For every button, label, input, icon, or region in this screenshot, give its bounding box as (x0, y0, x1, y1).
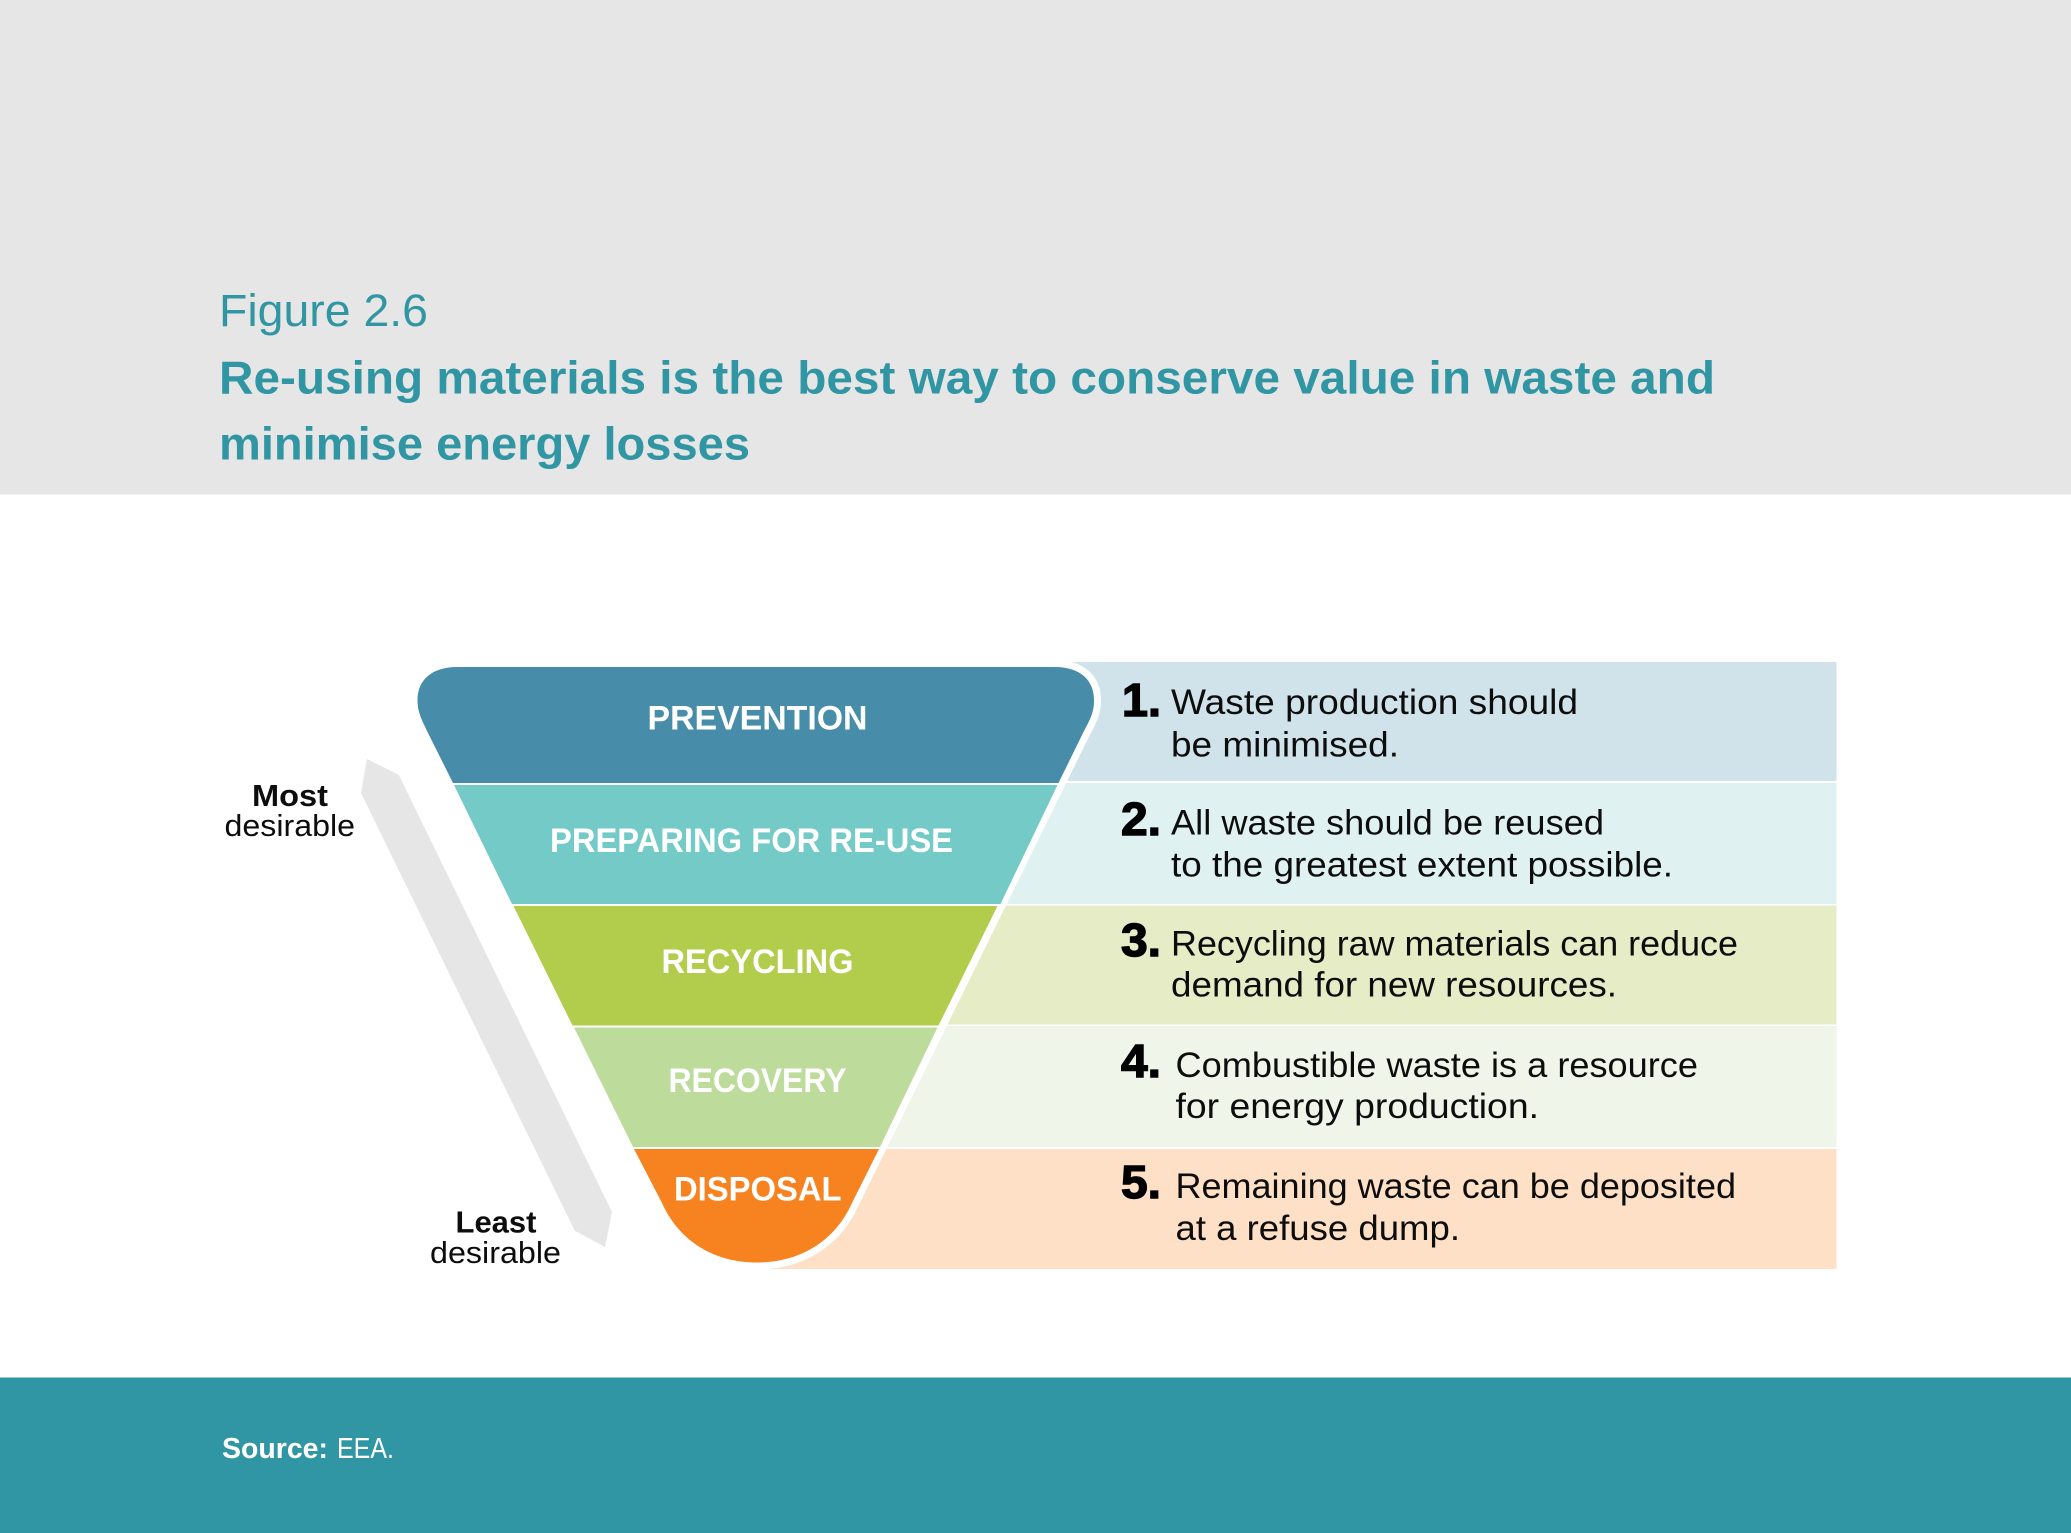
funnel tier: prevention: PREVENTION (648, 700, 868, 738)
statement 3: 3. (1121, 914, 1161, 966)
statement 2 (1121, 793, 1673, 884)
statement 2: to the greatest extent possible. (1171, 846, 1673, 884)
label: most desirable: desirable (224, 808, 355, 843)
source note: EEA. (337, 1433, 394, 1465)
label: least desirable: Least (456, 1204, 536, 1240)
label: least desirable: desirable (430, 1235, 561, 1270)
funnel white outline (418, 667, 1094, 1262)
row background 5 (757, 1149, 1836, 1269)
statement 5: 5. (1121, 1156, 1161, 1208)
statement 2: All waste should be reused (1171, 804, 1604, 842)
funnel tier: preparing for re-use: PREPARING FOR RE-USE (550, 822, 953, 860)
statement 5 (1121, 1156, 1736, 1248)
footer band (0, 1378, 2071, 1533)
row background 3 (757, 906, 1836, 1024)
source note (222, 1433, 394, 1465)
funnel tier: disposal (634, 1149, 879, 1262)
label: most desirable: Most (252, 778, 328, 813)
funnel hierarchy (418, 667, 1094, 1262)
funnel tier: disposal: DISPOSAL (674, 1170, 842, 1208)
statement 2: 2. (1121, 793, 1161, 845)
funnel tier: recycling (514, 906, 998, 1026)
row background 2 (757, 783, 1836, 904)
statement 1: Waste production should (1171, 683, 1578, 722)
statement 4 (1121, 1035, 1698, 1126)
statement 3: Recycling raw materials can reduce (1171, 924, 1738, 964)
statement 5: at a refuse dump. (1176, 1209, 1460, 1248)
row background 4 (757, 1026, 1836, 1147)
figure number: Figure 2.6 (219, 285, 428, 336)
funnel tier: recovery: RECOVERY (668, 1062, 847, 1100)
right-hand description rows (757, 662, 1836, 1269)
funnel tier: prevention (418, 667, 1094, 783)
statement 5: Remaining waste can be deposited (1176, 1167, 1736, 1206)
statement 4: 4. (1121, 1035, 1161, 1087)
funnel tier: recycling: RECYCLING (662, 943, 854, 981)
statement 4: Combustible waste is a resource (1176, 1046, 1698, 1085)
statement 4: for energy production. (1176, 1087, 1539, 1126)
statement 1: 1. (1122, 674, 1161, 726)
statement 3: demand for new resources. (1171, 966, 1617, 1004)
funnel tier: recovery (574, 1028, 938, 1147)
statement 3 (1121, 914, 1738, 1004)
source note: Source: (222, 1433, 328, 1465)
row background 1 (757, 662, 1836, 781)
title (219, 352, 1715, 470)
header band (0, 0, 2071, 494)
statement 1: be minimised. (1171, 726, 1399, 764)
label: least desirable (430, 1204, 561, 1270)
title: minimise energy losses (219, 418, 750, 470)
arrow: desirability scale (361, 759, 612, 1247)
statement 1 (1122, 674, 1578, 764)
funnel tier: preparing for re-use (454, 785, 1058, 904)
label: most desirable (224, 778, 355, 843)
title: Re-using materials is the best way to conserve value in waste and (219, 352, 1715, 404)
